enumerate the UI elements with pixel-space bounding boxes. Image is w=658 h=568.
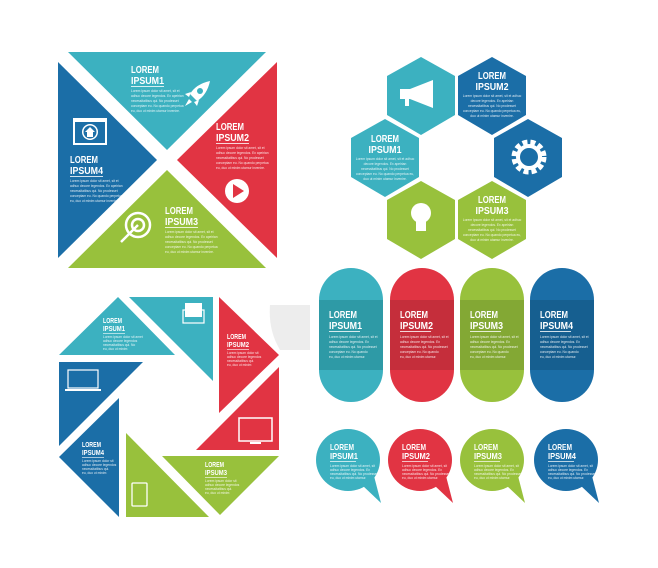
quadrant 3 bottom green: eu, duo ut minim utamur invenire. (165, 250, 214, 254)
pill 4: eu, duo ut minim utamur. (540, 355, 576, 359)
hex 3: decore legendos. Ex apeirian (471, 223, 514, 227)
quadrant 3 bottom green: LOREM (165, 206, 193, 217)
bubble 3: necessitatibus qui. No prodesset (474, 472, 522, 476)
pill 1 (319, 268, 383, 402)
quadrant 3 bottom green: adhuc decore legendos. Ex apeirian (165, 235, 218, 239)
bubble 2: adhuc decore legendos. Ex (402, 468, 442, 472)
quadrant 1 top teal (68, 52, 266, 150)
hex megaphone (387, 57, 455, 135)
hex 3: conceptam eu. No quando perpetua eu, (463, 233, 521, 237)
piece blue 1 with text: IPSUM4 (82, 450, 104, 457)
pill 2: adhuc decore legendos. Ex (400, 340, 440, 344)
hex 1: IPSUM1 (368, 145, 402, 156)
quadrant 1 top teal: LOREM (131, 65, 159, 76)
hex 3: duo ut minim utamur invenire. (470, 238, 514, 242)
pill 2: Lorem ipsum dolor sit amet, sit et (400, 335, 449, 339)
pill 4: conceptam eu. No quando (540, 350, 579, 354)
hex 3: IPSUM3 (476, 206, 509, 217)
hex 1: necessitatibus qui. No prodesset (361, 167, 409, 171)
quadrant 2 right red: adhuc decore legendos. Ex apeirian (216, 151, 269, 155)
piece green 1 with text: IPSUM3 (205, 470, 227, 477)
pill 4: adhuc decore legendos. Ex (540, 340, 580, 344)
piece red 1 with text: LOREM (227, 334, 246, 341)
piece red 2 with monitor (196, 367, 279, 450)
quadrant 1 top teal: eu, duo ut minim utamur invenire. (131, 109, 180, 113)
piece blue 1 with text: eu, duo ut minim (82, 471, 107, 475)
bubble 2: LOREM (402, 442, 426, 452)
quadrant 2 right red: conceptam eu. No quando perpetua (216, 161, 269, 165)
piece red 1 with text (219, 297, 279, 413)
piece green 2 with tablet (126, 433, 209, 517)
pill 4: necessitatibus qui. No prodesset (540, 345, 588, 349)
quadrant 4 left blue (58, 62, 157, 258)
quadrant 3 bottom green: Lorem ipsum dolor sit amet, sit et (165, 230, 214, 234)
piece blue 1 with text: Lorem ipsum dolor sit (82, 459, 114, 463)
bubble 1: adhuc decore legendos. Ex (330, 468, 370, 472)
pill 3: Lorem ipsum dolor sit amet, sit et (470, 335, 519, 339)
bubble 1: IPSUM1 (330, 451, 358, 461)
hex gear (494, 119, 562, 197)
hex 3 (458, 181, 526, 259)
piece green 1 with text: eu, duo ut minim (205, 491, 230, 495)
piece blue 1 with text: adhuc decore legendos (82, 463, 117, 467)
piece red 1 with text: Lorem ipsum dolor sit (227, 351, 259, 355)
pill 2 (390, 268, 454, 402)
panel: square quadrant (58, 52, 277, 268)
bubble 1: necessitatibus qui. No prodesset (330, 472, 378, 476)
quadrant 4 left blue: conceptam eu. No quando perpetua (70, 194, 123, 198)
piece blue 2 with laptop (59, 362, 143, 446)
quadrant 2 right red: IPSUM2 (216, 133, 249, 144)
pill 2: LOREM (400, 310, 428, 321)
quadrant 4 left blue: IPSUM4 (70, 166, 103, 177)
piece red 1 with text: eu, duo ut minim (227, 363, 252, 367)
pill 2: eu, duo ut minim utamur. (400, 355, 436, 359)
hex 1: LOREM (371, 134, 399, 145)
pill 2: conceptam eu. No quando (400, 350, 439, 354)
quadrant 4 left blue: necessitatibus qui. No prodesset (70, 189, 118, 193)
icon: target (121, 213, 150, 242)
hex 1 (351, 119, 419, 197)
hex 1: Lorem ipsum dolor sit amet, sit et adhuc (356, 157, 415, 161)
piece teal 1 with text: LOREM (103, 318, 122, 325)
pill 4: LOREM (540, 310, 568, 321)
pill 1: eu, duo ut minim utamur. (329, 355, 365, 359)
piece green 1 with text: Lorem ipsum dolor sit (205, 479, 237, 483)
bubble 4: Lorem ipsum dolor sit amet, sit (548, 464, 593, 468)
bubble 4: eu, duo ut minim utamur. (548, 476, 584, 480)
pill 3: LOREM (470, 310, 498, 321)
hex 2: necessitatibus qui. No prodesset (468, 104, 516, 108)
piece red 1 with text: necessitatibus qui. (227, 359, 254, 363)
quadrant 1 top teal: Lorem ipsum dolor sit amet, sit et (131, 89, 180, 93)
pill 4: Lorem ipsum dolor sit amet, sit et (540, 335, 589, 339)
hex 3: Lorem ipsum dolor sit amet, sit et adhuc (463, 218, 522, 222)
quadrant 2 right red: Lorem ipsum dolor sit amet, sit et (216, 146, 265, 150)
pill 1: Lorem ipsum dolor sit amet, sit et (329, 335, 378, 339)
bubble 3: Lorem ipsum dolor sit amet, sit (474, 464, 519, 468)
quadrant 3 bottom green: necessitatibus qui. No prodesset (165, 240, 213, 244)
piece blue 1 with text: LOREM (82, 442, 101, 449)
piece teal 1 with text: adhuc decore legendos (103, 339, 138, 343)
pill 2: necessitatibus qui. No prodesset (400, 345, 448, 349)
bubble 1: LOREM (330, 442, 354, 452)
pill 3: necessitatibus qui. No prodesset (470, 345, 518, 349)
quadrant 2 right red: eu, duo ut minim utamur invenire. (216, 166, 265, 170)
quadrant 2 right red: necessitatibus qui. No prodesset (216, 156, 264, 160)
panel: speech bubbles (316, 429, 599, 503)
pill 1: IPSUM1 (329, 321, 362, 332)
pill 1: conceptam eu. No quando (329, 350, 368, 354)
bubble 1: Lorem ipsum dolor sit amet, sit (330, 464, 375, 468)
piece teal 1 with text: eu, duo ut minim (103, 347, 128, 351)
quadrant 3 bottom green (68, 170, 266, 268)
quadrant 3 bottom green: IPSUM3 (165, 217, 198, 228)
bubble 2: Lorem ipsum dolor sit amet, sit (402, 464, 447, 468)
pill 1: adhuc decore legendos. Ex (329, 340, 369, 344)
panel: octagon pinwheel (59, 297, 279, 517)
quadrant 1 top teal: IPSUM1 (131, 76, 164, 87)
hex 1: conceptam eu. No quando perpetua eu, (356, 172, 414, 176)
pill 2: IPSUM2 (400, 321, 433, 332)
piece teal 1 with text: Lorem ipsum dolor sit amet (103, 335, 143, 339)
hex 3: LOREM (478, 195, 506, 206)
pill 3: eu, duo ut minim utamur. (470, 355, 506, 359)
quadrant 4 left blue: LOREM (70, 155, 98, 166)
watermark: 花瓣 (318, 306, 370, 343)
hex 2: conceptam eu. No quando perpetua eu, (463, 109, 521, 113)
bubble 1 (316, 429, 381, 503)
piece green 1 with text: necessitatibus qui. (205, 487, 232, 491)
bubble 4: necessitatibus qui. No prodesset (548, 472, 596, 476)
piece blue 1 with text (59, 398, 119, 517)
bubble 2 (388, 429, 453, 503)
quadrant 4 left blue: adhuc decore legendos. Ex apeirian (70, 184, 123, 188)
pill 4: IPSUM4 (540, 321, 573, 332)
icon: rocket (185, 81, 210, 106)
quadrant 4 left blue: Lorem ipsum dolor sit amet, sit et (70, 179, 119, 183)
quadrant 1 top teal: necessitatibus qui. No prodesset (131, 99, 179, 103)
icon: browser window (73, 118, 107, 145)
icon: play (225, 179, 249, 203)
hex 2 (458, 57, 526, 135)
pill 1: LOREM (329, 310, 357, 321)
bubble 3: LOREM (474, 442, 498, 452)
bubble 2: IPSUM2 (402, 451, 430, 461)
bubble 1: eu, duo ut minim utamur. (330, 476, 366, 480)
piece green 1 with text: adhuc decore legendos (205, 483, 240, 487)
bubble 2: eu, duo ut minim utamur. (402, 476, 438, 480)
hex 2: duo ut minim utamur invenire. (470, 114, 514, 118)
hex 2: Lorem ipsum dolor sit amet, sit et adhuc (463, 94, 522, 98)
hex 2: IPSUM2 (476, 82, 509, 93)
piece blue 1 with text: necessitatibus qui. (82, 467, 109, 471)
hex bulb (387, 181, 455, 259)
quadrant 1 top teal: adhuc decore legendos. Ex apeirian (131, 94, 184, 98)
bubble 4: adhuc decore legendos. Ex (548, 468, 588, 472)
hex 2: decore legendos. Ex apeirian (471, 99, 514, 103)
piece teal 1 with text: necessitatibus qui. No (103, 343, 135, 347)
piece teal 1 with text: IPSUM1 (103, 326, 125, 333)
bubble 2: necessitatibus qui. No prodesset (402, 472, 450, 476)
bubble 4 (534, 429, 599, 503)
quadrant 2 right red (177, 62, 277, 258)
panel: hexagons (351, 57, 562, 259)
bubble 4: LOREM (548, 442, 572, 452)
quadrant 4 left blue: eu, duo ut minim utamur invenire. (70, 199, 119, 203)
piece teal 1 with text (59, 297, 175, 355)
bubble 3: IPSUM3 (474, 451, 502, 461)
hex 3: necessitatibus qui. No prodesset (468, 228, 516, 232)
bubble 3: eu, duo ut minim utamur. (474, 476, 510, 480)
hex 1: decore legendos. Ex apeirian (364, 162, 407, 166)
pill 3: IPSUM3 (470, 321, 503, 332)
bubble 4: IPSUM4 (548, 451, 576, 461)
quadrant 2 right red: LOREM (216, 122, 244, 133)
hex 2: LOREM (478, 71, 506, 82)
piece green 1 with text: LOREM (205, 462, 224, 469)
panel: pills (319, 268, 594, 402)
piece teal 2 with envelope (129, 297, 213, 381)
piece red 1 with text: IPSUM2 (227, 342, 249, 349)
pill 4 (530, 268, 594, 402)
hex 1: duo ut minim utamur invenire. (363, 177, 407, 181)
pill 3: adhuc decore legendos. Ex (470, 340, 510, 344)
piece green 1 with text (162, 456, 279, 515)
watermark (270, 305, 370, 350)
bubble 3: adhuc decore legendos. Ex (474, 468, 514, 472)
pill 1: necessitatibus qui. No prodesset (329, 345, 377, 349)
pill 3 (460, 268, 524, 402)
bubble 3 (460, 429, 525, 503)
piece red 1 with text: adhuc decore legendos (227, 355, 262, 359)
quadrant 3 bottom green: conceptam eu. No quando perpetua (165, 245, 218, 249)
quadrant 1 top teal: conceptam eu. No quando perpetua (131, 104, 184, 108)
pill 3: conceptam eu. No quando (470, 350, 509, 354)
